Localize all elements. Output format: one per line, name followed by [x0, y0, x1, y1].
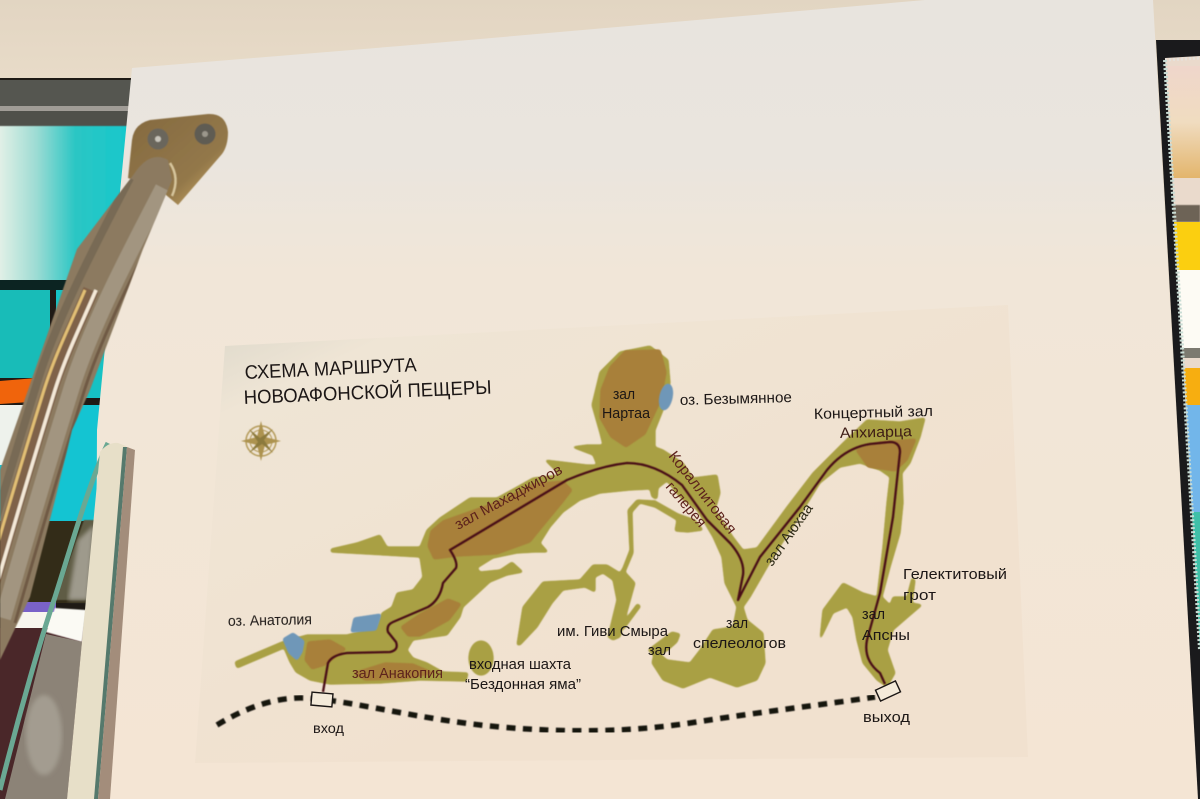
label: Apsny hall: зал: [862, 606, 885, 623]
glass partition with pillar: [0, 443, 135, 799]
label: entrance shaft: входная шахта: [469, 656, 572, 673]
label: entrance shaft: [465, 656, 581, 693]
label: Koralitovaya gallery: Кораллитовая: [665, 448, 740, 537]
label: Makhadzhirov hall: зал Махаджиров: [452, 461, 565, 534]
halls: [305, 350, 916, 680]
label: Koralitovaya gallery: галерея: [662, 479, 710, 531]
exit marker: [875, 681, 901, 701]
title: [243, 354, 492, 409]
route scheme card: [195, 305, 1028, 763]
label: Nartaa hall: зал: [613, 386, 635, 403]
ceiling: [0, 0, 1200, 90]
cave: passages: [235, 346, 925, 688]
label: entrance shaft: “Бездонная яма”: [465, 676, 581, 693]
label: Anakopia hall: зал Анакопия: [352, 665, 443, 682]
right window: [1156, 40, 1200, 799]
label: Gelektitovy grotto: [903, 566, 1007, 604]
left window: [0, 78, 132, 799]
map labels: [228, 354, 1007, 736]
label: speleologists hall: зал: [726, 615, 748, 632]
stainless grab bar: [0, 157, 178, 660]
lakes: [283, 383, 675, 660]
cave map: [235, 346, 925, 692]
grab bar bracket: [128, 114, 228, 205]
label: Ayukhaa hall: зал Аюхаа: [761, 500, 817, 569]
label: Givi Smyra hall: им. Гиви Смыра: [557, 623, 669, 640]
label: Gelektitovy grotto: грот: [903, 587, 936, 604]
label: Concert hall Apkhiartsa: Апхиарца: [840, 423, 913, 442]
pillar: [67, 443, 126, 799]
title: НОВОАФОНСКОЙ ПЕЩЕРЫ: [243, 375, 492, 409]
entrance marker: [311, 692, 333, 707]
icon: compass rose: [241, 421, 281, 461]
label: Anatolia lake: оз. Анатолия: [228, 611, 312, 630]
route line: [323, 442, 900, 692]
label: Concert hall Apkhiartsa: Концертный зал: [814, 403, 933, 423]
label: Apsny hall: [862, 606, 910, 644]
label: exit: выход: [863, 709, 910, 726]
dashed surface path: [217, 697, 875, 731]
label: speleologists hall: спелеологов: [693, 635, 786, 652]
label: speleologists hall: [693, 615, 786, 652]
label: Givi Smyra hall: [557, 623, 671, 659]
title: СХЕМА МАРШРУТА: [244, 354, 417, 384]
label: Bezymyannoe lake: оз. Безымянное: [680, 389, 792, 409]
label: Givi Smyra hall: зал: [648, 642, 671, 659]
label: Nartaa hall: [602, 386, 651, 422]
label: Apsny hall: Апсны: [862, 627, 910, 644]
label: Concert hall Apkhiartsa: [814, 403, 933, 442]
label: Gelektitovy grotto: Гелектитовый: [903, 566, 1007, 583]
label: entrance: вход: [313, 720, 344, 736]
label: Nartaa hall: Нартаа: [602, 405, 651, 422]
